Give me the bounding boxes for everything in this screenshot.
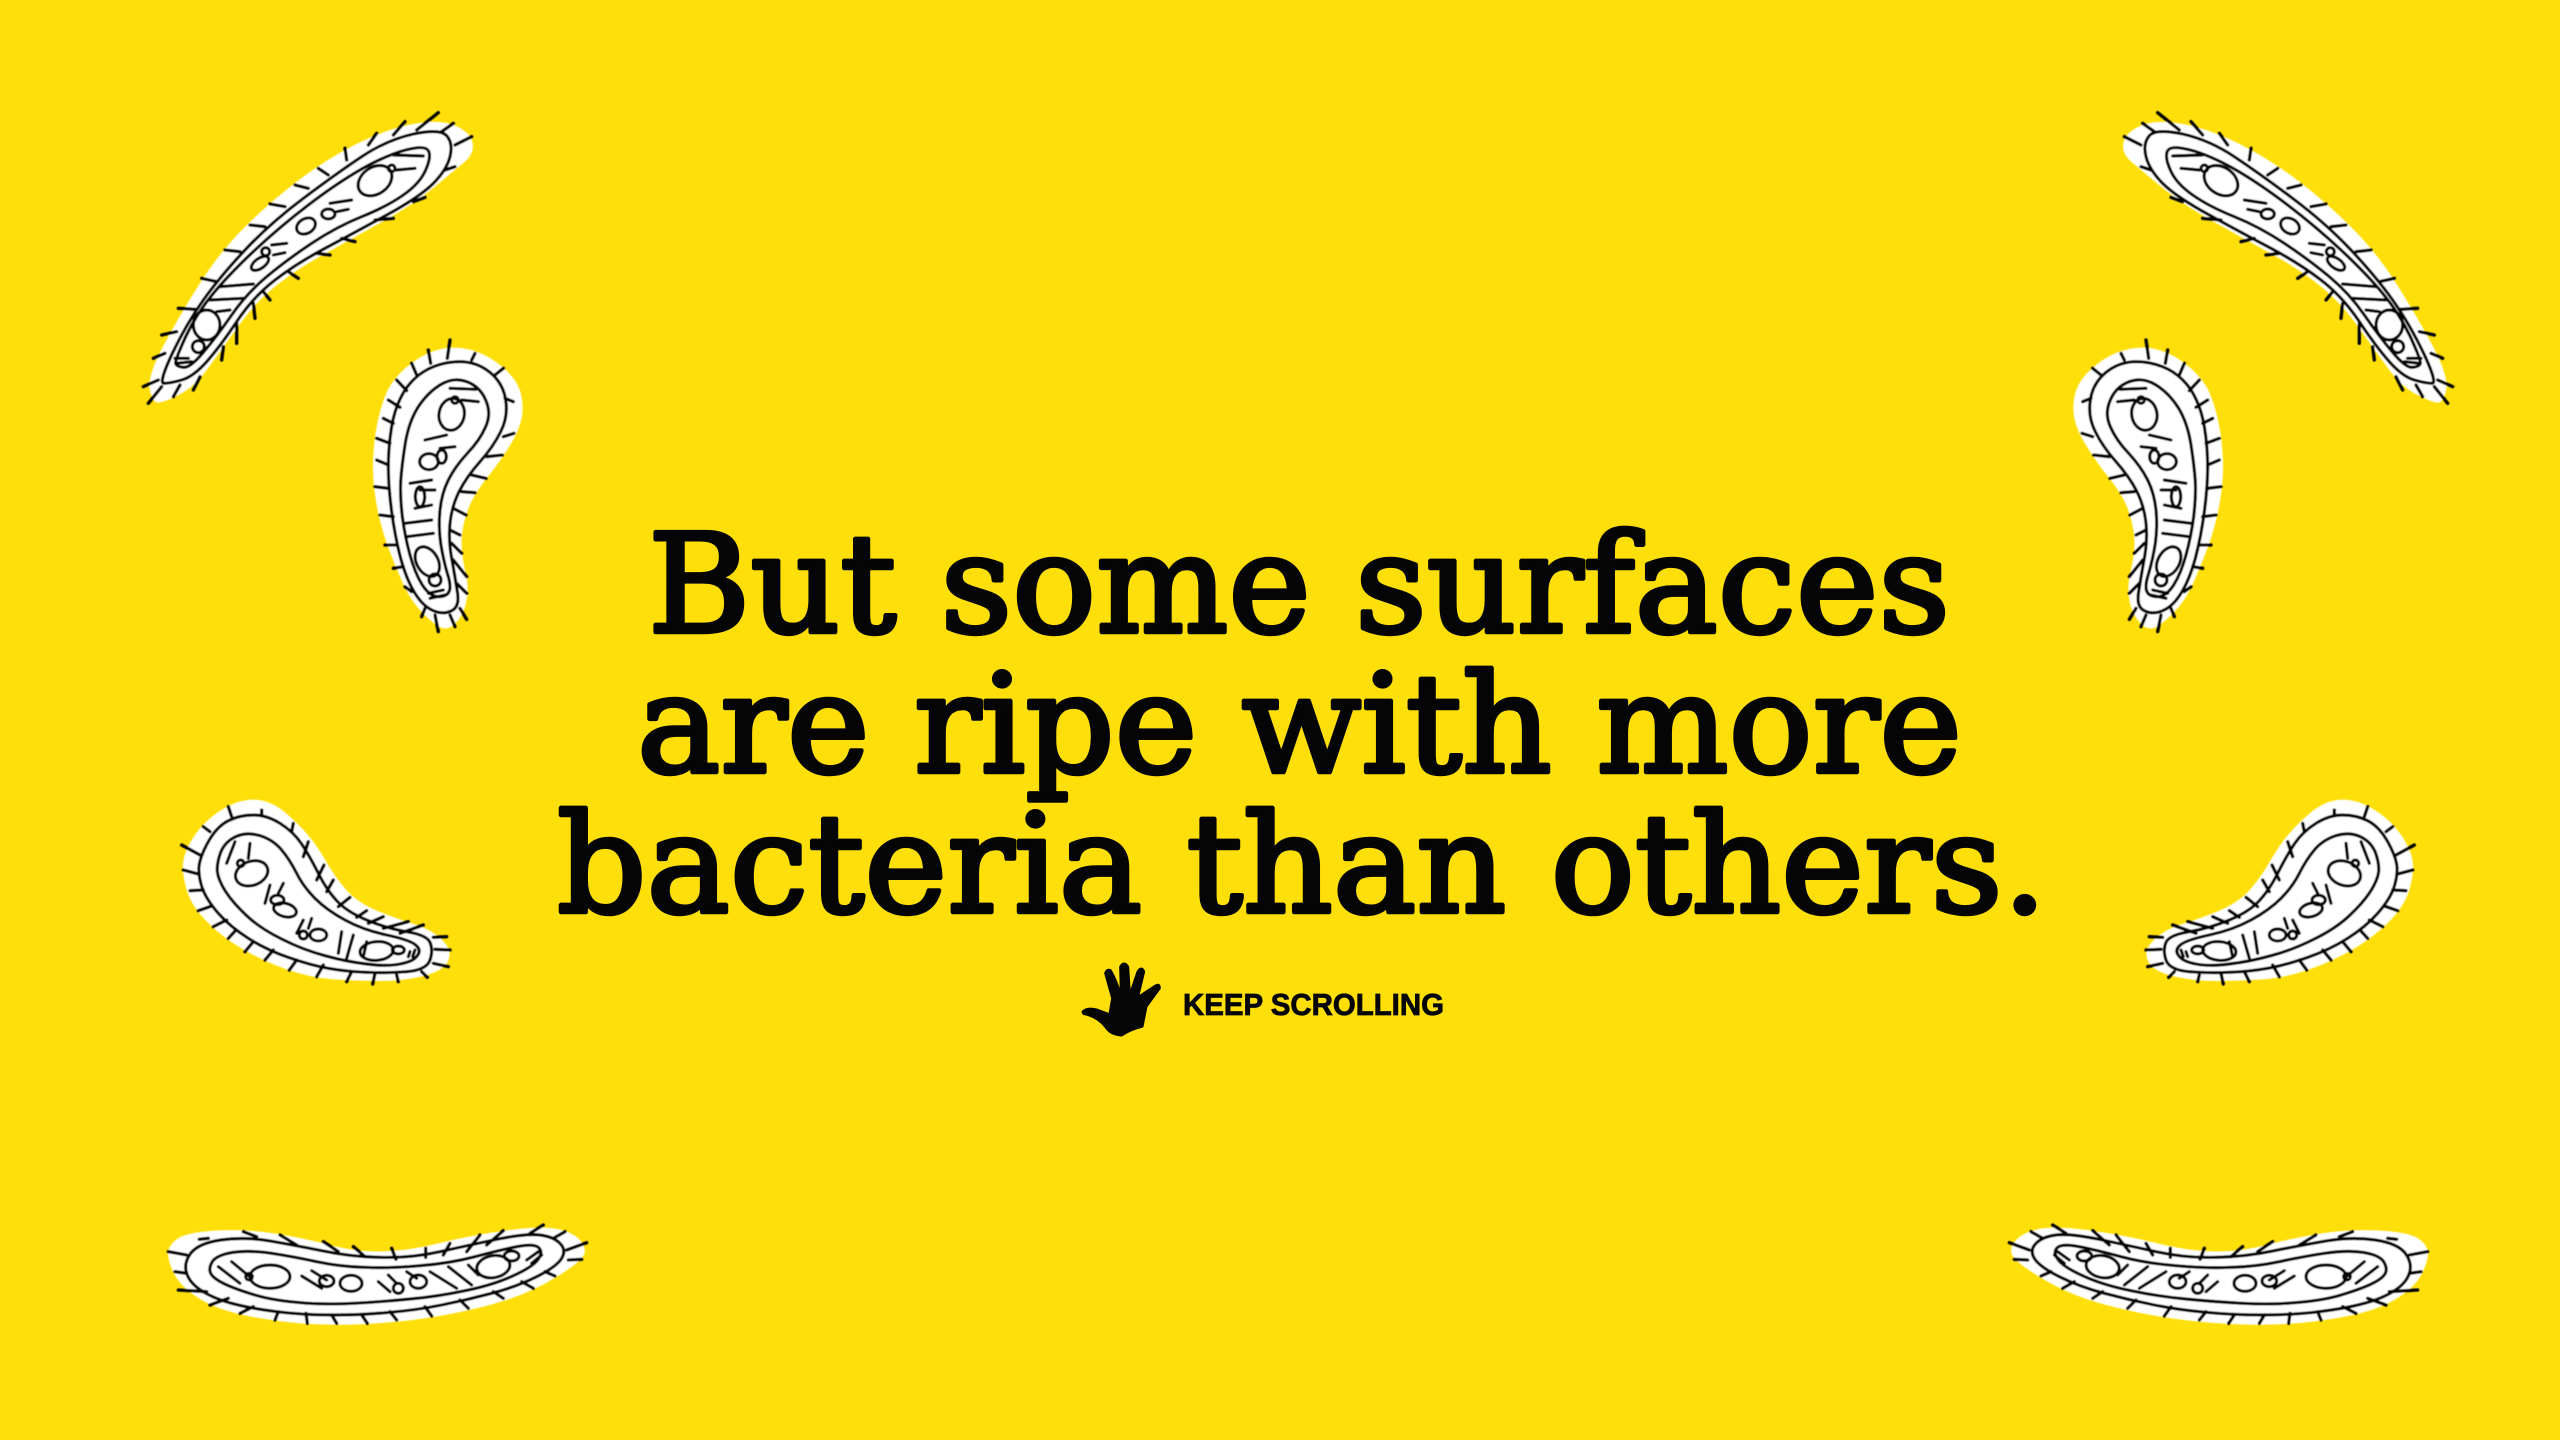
icon: bacterium middle left, tilted teardrop	[182, 801, 450, 984]
title: bacteria than others.	[557, 786, 2047, 945]
title	[557, 506, 2047, 945]
title: But some surfaces	[648, 506, 1950, 665]
icon: bacterium bottom left, horizontal	[168, 1225, 587, 1324]
icon: bacterium top right, long curved	[2124, 113, 2453, 403]
icon: bacterium upper right, teardrop	[2074, 340, 2222, 632]
icon: bacterium middle right, tilted teardrop	[2146, 801, 2414, 984]
icon: bacterium upper left, teardrop	[374, 340, 522, 632]
title: are ripe with more	[637, 646, 1962, 805]
icon: bacterium bottom right, horizontal	[2009, 1225, 2428, 1324]
keep scrolling label: KEEP SCROLLING	[1183, 987, 1444, 1022]
icon: bacterium top left, long curved	[143, 113, 472, 403]
icon: black hand	[1082, 963, 1160, 1036]
